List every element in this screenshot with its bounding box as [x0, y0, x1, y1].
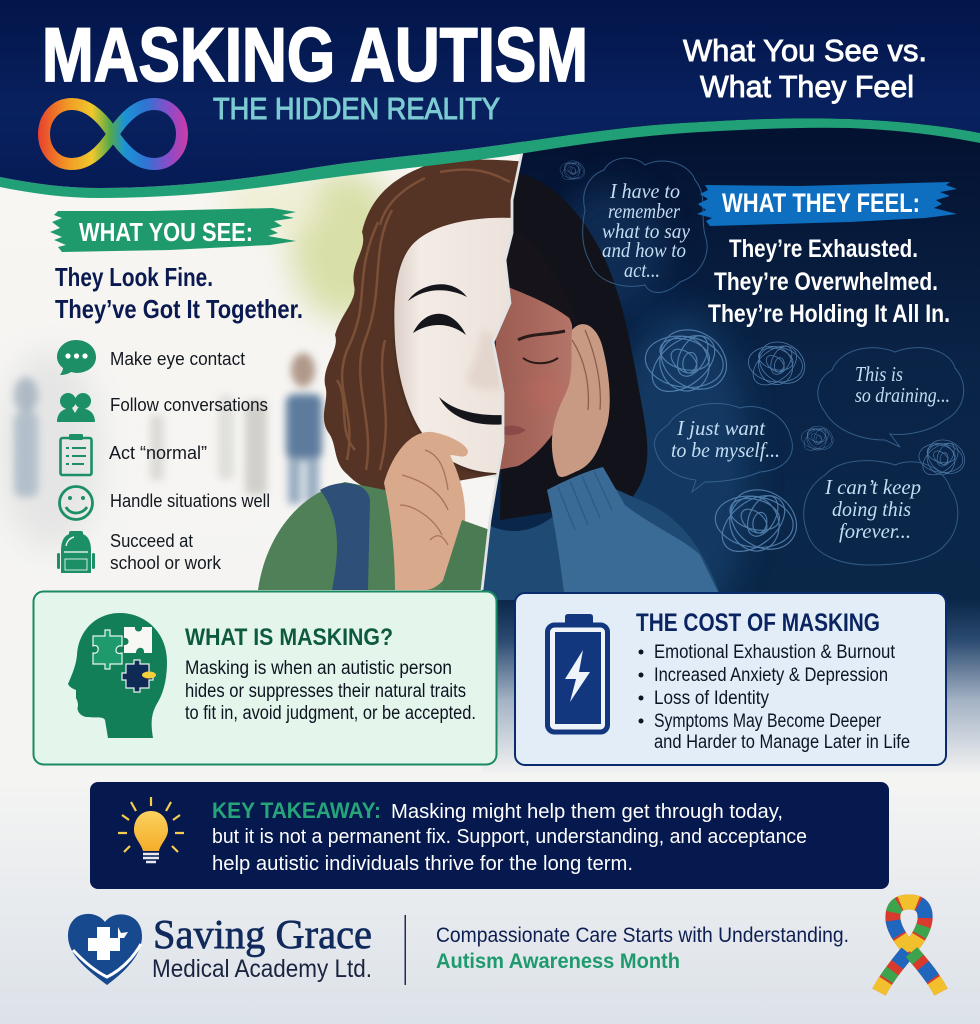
list item: act normal: Act “normal” — [109, 443, 207, 463]
list item: handle situations: Handle situations well — [110, 491, 270, 511]
callout: key takeaway — [90, 782, 889, 889]
thought: draining: This is — [855, 362, 903, 386]
takeaway text — [212, 798, 807, 875]
thought: remember — [602, 179, 691, 282]
title: MASKING AUTISM — [42, 13, 588, 98]
brush heading: WHAT THEY FEEL: — [722, 188, 920, 218]
takeaway text: but it is not a permanent fix. Support, understanding, and acceptance — [212, 826, 807, 848]
mask nose shadow — [467, 333, 500, 390]
thought: keep doing: forever... — [839, 519, 911, 543]
eyebrow and closed eye — [518, 331, 565, 363]
bullet list: Loss of Identity — [654, 688, 769, 709]
icon: head with puzzle pieces — [68, 613, 167, 738]
panel: what you see — [50, 208, 303, 573]
list item: succeed — [57, 531, 222, 573]
hair: dark — [500, 172, 647, 520]
bullet list: Emotional Exhaustion & Burnout — [654, 642, 896, 663]
right dark background — [470, 100, 980, 790]
scribble cluster 4 — [917, 433, 971, 481]
mask eyebrow — [408, 284, 467, 301]
cheek — [531, 384, 550, 400]
hand on temple — [552, 324, 610, 477]
cloud: remember what to say — [583, 158, 707, 293]
cloud: I just want — [654, 403, 792, 492]
sweater sleeve — [547, 467, 722, 600]
bullet list: and Harder to Manage Later in Life — [654, 732, 910, 753]
thought: remember: I have to — [609, 179, 680, 203]
sweater: blue — [478, 482, 722, 600]
thought: be myself: to be myself... — [671, 438, 780, 462]
panel: cost of masking — [515, 593, 946, 765]
takeaway text: Masking might help them get through today, — [391, 801, 783, 823]
thought: draining — [855, 362, 950, 407]
body text: hides or suppresses their natural traits — [185, 681, 466, 702]
takeaway text: KEY TAKEAWAY: — [212, 798, 381, 823]
list item: conversations — [57, 393, 268, 422]
statement: They’re Exhausted. — [729, 235, 918, 263]
navy shape — [0, 0, 980, 188]
photo: smiling side with mask — [258, 160, 530, 590]
scribble cluster 2 — [746, 334, 813, 393]
icon: battery — [548, 614, 608, 732]
scribble cluster 6 — [559, 157, 588, 183]
thought: remember: remember — [608, 199, 681, 223]
cloud: I can't keep — [804, 461, 958, 565]
statement: They Look Fine. — [55, 262, 213, 292]
backpack strap — [320, 483, 370, 590]
heading: THE COST OF MASKING — [636, 609, 880, 637]
panel: what is masking — [34, 592, 496, 764]
heading: WHAT IS MASKING? — [185, 624, 393, 651]
bullet list — [638, 642, 910, 753]
awareness month: Autism Awareness Month — [436, 950, 680, 973]
thought: remember: what to say — [602, 219, 691, 243]
hand holding mask — [384, 432, 468, 590]
thought: keep doing: doing this — [832, 497, 911, 521]
right tagline — [683, 33, 927, 104]
mask — [394, 218, 515, 473]
thought: remember: act... — [624, 258, 660, 282]
statement — [708, 235, 950, 328]
brand subtitle: Medical Academy Ltd. — [152, 955, 372, 983]
sweater cuff — [442, 520, 488, 581]
panel: what they feel — [602, 179, 957, 543]
brush heading: WHAT YOU SEE: — [79, 217, 253, 247]
thought: keep doing — [824, 475, 921, 543]
thought: keep doing: I can’t keep — [824, 475, 921, 499]
thought: be myself — [671, 416, 780, 462]
thought: remember: and how to — [602, 238, 686, 262]
torn paper seam — [482, 152, 522, 590]
statement: They’ve Got It Together. — [55, 294, 303, 324]
list item: conversations: Follow conversations — [110, 395, 268, 415]
list item: succeed: Succeed at — [110, 531, 193, 551]
list item: succeed: school or work — [110, 553, 222, 573]
bullet list: Symptoms May Become Deeper — [654, 711, 882, 732]
statement — [55, 262, 303, 324]
lips — [503, 425, 526, 435]
footer — [68, 902, 941, 992]
bullet list: Increased Anxiety & Depression — [654, 665, 888, 686]
icon: heart logo — [68, 914, 142, 985]
scribble cluster 5 — [712, 478, 808, 563]
sweater: green — [258, 482, 444, 590]
body text: to fit in, avoid judgment, or be accepted. — [185, 703, 476, 724]
scribble cluster 3 — [800, 421, 837, 455]
statement: They’re Overwhelmed. — [714, 268, 938, 296]
thought: draining: so draining... — [855, 383, 950, 407]
body text — [185, 658, 476, 724]
scribble cluster 1 — [642, 318, 738, 403]
cuff ribbing — [558, 471, 612, 530]
list item: act normal — [60, 434, 207, 475]
brush heading — [50, 208, 296, 252]
hair: left brown — [324, 160, 530, 493]
mask mouth — [439, 397, 505, 425]
takeaway text: help autistic individuals thrive for the long term. — [212, 853, 633, 875]
icon: puzzle ribbon — [879, 902, 941, 992]
icon: light bulb — [118, 797, 184, 862]
list item: handle situations — [60, 486, 270, 520]
cloud: this is so draining — [818, 348, 964, 447]
green wave — [0, 118, 980, 198]
header band — [0, 0, 980, 198]
icon: rainbow infinity — [44, 104, 182, 164]
subtitle: THE HIDDEN REALITY — [213, 91, 500, 126]
thought: be myself: I just want — [676, 416, 766, 440]
body text: Masking is when an autistic person — [185, 658, 452, 679]
list item: eye contact: Make eye contact — [110, 349, 245, 369]
photo: exhausted side — [478, 172, 722, 600]
right tagline: What You See vs. — [683, 33, 927, 68]
left blurred school photo background — [0, 170, 400, 550]
list item: eye contact — [57, 340, 245, 375]
face — [496, 288, 572, 470]
slogan: Compassionate Care Starts with Understanding. — [436, 924, 849, 947]
right tagline: What They Feel — [700, 69, 914, 104]
forehead hair fringe — [507, 266, 570, 318]
thought bubbles and scribbles — [559, 157, 971, 565]
mask eye — [413, 314, 466, 335]
brand name: Saving Grace — [153, 911, 372, 957]
brush heading — [697, 182, 957, 226]
hair highlights — [337, 170, 510, 470]
